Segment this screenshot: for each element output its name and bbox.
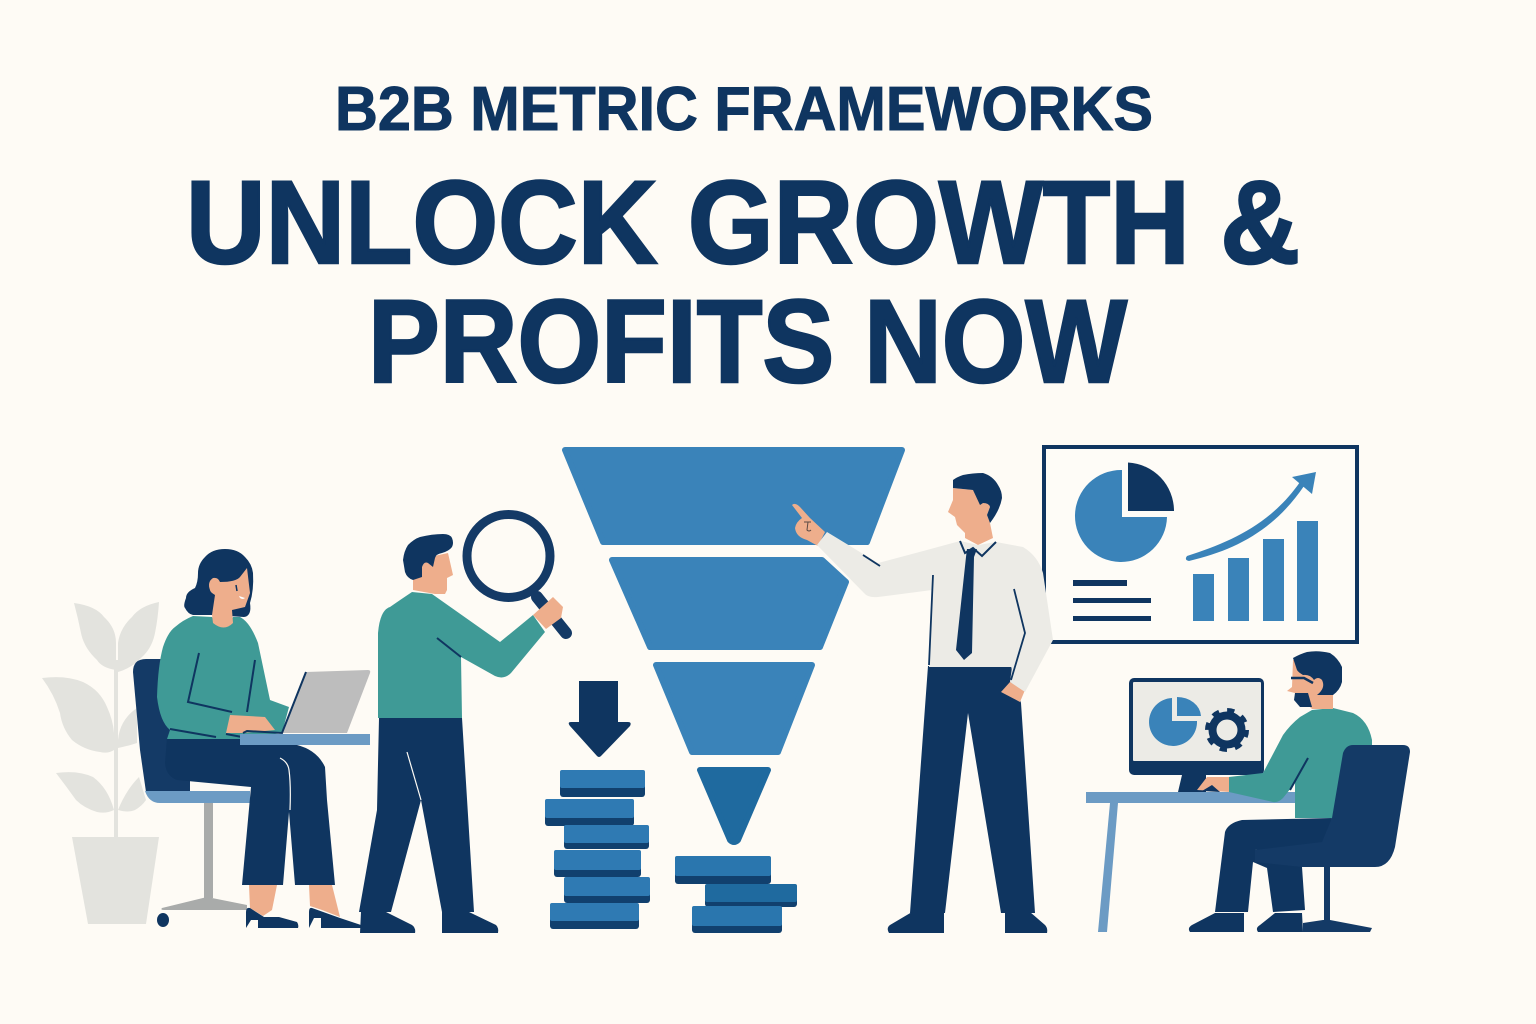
funnel tier 1 [565, 450, 902, 542]
head and neck [948, 488, 993, 545]
coin stack: left [545, 770, 650, 929]
magnifying glass [467, 514, 566, 633]
beard [1294, 693, 1312, 707]
ear [1314, 678, 1324, 688]
woman's hand [226, 715, 275, 733]
glasses [1291, 678, 1313, 683]
title line 1: UNLOCK GROWTH & [186, 157, 1300, 289]
sweater [1229, 708, 1372, 818]
shirt fold lines [863, 555, 1025, 680]
title line 2: PROFITS NOW [368, 276, 1128, 408]
shoes [360, 912, 415, 933]
growth arrow [1186, 472, 1316, 561]
sweater fold lines [170, 653, 255, 737]
woman's head and hair [184, 549, 253, 628]
head and hair [403, 534, 453, 594]
icon: potted plant [42, 602, 159, 924]
hands [1197, 777, 1230, 792]
shoes [888, 912, 944, 933]
shoes [1189, 913, 1244, 932]
shirt and arm [817, 532, 1053, 692]
funnel [565, 450, 902, 842]
presentation board [1044, 447, 1357, 642]
man with magnifying glass [359, 514, 566, 933]
sweater and arm [378, 592, 545, 718]
desk worker [1086, 651, 1410, 932]
hair [1293, 651, 1342, 695]
woman at laptop [133, 549, 370, 928]
woman's legs and shoes [165, 738, 361, 928]
funnel tier 3 [656, 665, 812, 752]
chair [1255, 745, 1410, 932]
icon: down arrow [569, 681, 631, 757]
board frame [1044, 447, 1357, 642]
hair [953, 473, 1002, 523]
woman's sweater [157, 616, 289, 739]
trousers [1215, 818, 1332, 912]
desk [1086, 792, 1295, 932]
computer monitor [1129, 678, 1264, 792]
hand [533, 597, 563, 629]
trousers [910, 666, 1035, 913]
gear icon [1208, 711, 1246, 749]
subtitle: B2B Metric Frameworks: B2B METRIC FRAMEWORKS [335, 75, 1153, 144]
funnel tier 2 [612, 560, 846, 647]
bar chart [1193, 521, 1318, 621]
funnel tier 4 [700, 770, 768, 842]
collar [960, 541, 996, 556]
tie [956, 549, 977, 660]
text lines [1073, 580, 1151, 621]
trousers [359, 718, 474, 912]
screen pie chart [1149, 697, 1201, 746]
pie chart [1075, 462, 1174, 562]
pointing hand [792, 504, 825, 546]
pocket hand [1001, 682, 1025, 702]
presenter [792, 473, 1053, 933]
coin stack: right [675, 856, 797, 933]
head [1287, 651, 1342, 709]
office chair [133, 659, 250, 927]
laptop [240, 670, 370, 745]
